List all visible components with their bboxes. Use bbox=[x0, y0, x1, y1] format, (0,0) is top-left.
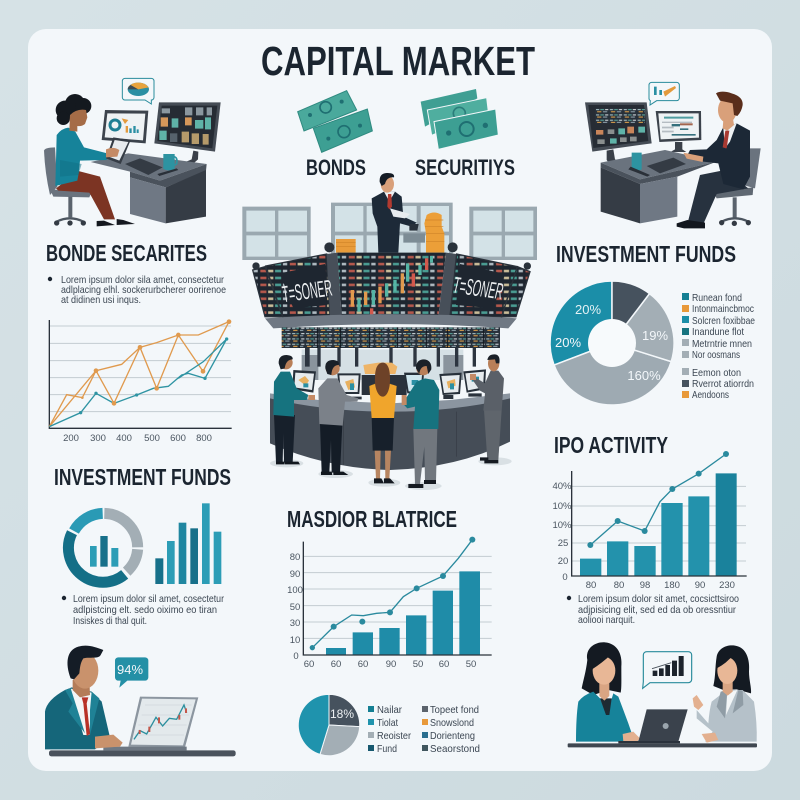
bar chart: masdior blatrice: 100 bbox=[287, 585, 303, 596]
bar chart: masdior blatrice bbox=[287, 537, 492, 670]
legend: investment funds: Aendoons bbox=[692, 389, 729, 401]
heading: investment funds right: INVESTMENT FUNDS bbox=[556, 241, 736, 267]
text block: bonde securities: at didinen usi inqus. bbox=[61, 294, 141, 306]
big monitor bbox=[154, 102, 221, 165]
legend: investment funds: Inandune flot bbox=[692, 326, 744, 338]
icon: speech bubble with pie bbox=[122, 78, 154, 104]
text block: investment funds: adlpistcing elt. sedo oiximo eo tiran bbox=[73, 604, 217, 616]
bar chart: ipo activity: 10% bbox=[552, 520, 572, 531]
desk bbox=[601, 150, 717, 223]
pie chart: bottom bbox=[298, 694, 360, 756]
pie label: 18% bbox=[330, 707, 354, 721]
illustration: two women with laptop bbox=[568, 642, 757, 747]
legend: investment funds: Eemon oton bbox=[692, 367, 741, 379]
illustration: man at desk bbox=[585, 82, 761, 228]
small monitor bbox=[102, 110, 148, 143]
bar chart: ipo activity: 180 bbox=[664, 580, 680, 591]
bar chart: masdior blatrice: 50 bbox=[413, 659, 423, 670]
trader five bbox=[470, 354, 504, 463]
bar chart: ipo activity: 10% bbox=[552, 501, 572, 512]
stock ticker and candles bbox=[351, 256, 433, 315]
trader two bbox=[318, 360, 358, 475]
legend: bottom pie: Tiolat bbox=[377, 717, 398, 729]
donut chart: investment funds bbox=[550, 281, 674, 405]
line chart: bonde securities bbox=[49, 319, 232, 444]
legend: bottom pie: Topeet fond bbox=[430, 704, 479, 716]
lower floor bbox=[265, 314, 517, 490]
icon: bonds banknotes bbox=[298, 91, 372, 152]
bar chart: ipo activity: 25 bbox=[558, 538, 568, 549]
bar chart: masdior blatrice: 80 bbox=[290, 552, 300, 563]
desk bbox=[91, 153, 207, 223]
bar chart: masdior blatrice: 60 bbox=[304, 659, 314, 670]
bar chart: ipo activity: 90 bbox=[695, 580, 705, 591]
illustration: woman at desk bbox=[44, 78, 221, 226]
text block: investment funds bbox=[62, 593, 224, 627]
legend: bottom pie: Seaorstond bbox=[430, 743, 480, 755]
heading: investment funds left: INVESTMENT FUNDS bbox=[54, 464, 231, 490]
windows bbox=[242, 203, 537, 260]
laptop bbox=[103, 697, 198, 750]
heading: bonde securities: BONDE SECARITES bbox=[46, 240, 207, 266]
text block: bonde securities bbox=[48, 274, 226, 306]
chair bbox=[713, 148, 761, 226]
legend: bottom pie: Dorienteng bbox=[430, 730, 475, 742]
small monitor bbox=[656, 111, 701, 152]
bar chart: masdior blatrice: 90 bbox=[386, 659, 396, 670]
legend: bottom pie: Nailar bbox=[377, 704, 402, 716]
line chart: bonde securities: 600 bbox=[170, 433, 186, 444]
legend: investment funds: Solcren foxibbae bbox=[692, 315, 755, 327]
upper screens bbox=[252, 242, 531, 317]
legend: investment funds: Metrntrie mnen bbox=[692, 338, 752, 350]
legend: bottom pie: Snowslond bbox=[430, 717, 474, 729]
shadows bbox=[270, 457, 512, 490]
bar chart: ipo activity: 40% bbox=[552, 481, 572, 492]
illustration: man with laptop bbox=[45, 646, 236, 756]
trader one bbox=[273, 355, 315, 464]
label: percent: 94% bbox=[117, 662, 143, 677]
laptop bbox=[618, 709, 688, 743]
text block: ipo activity: aoliooi narquit. bbox=[578, 614, 635, 626]
bar chart: ipo activity: 0 bbox=[562, 572, 568, 583]
man figure bbox=[45, 646, 123, 749]
illustration: trading floor: T=SONER bbox=[452, 272, 505, 304]
heading: masdior blatrice: MASDIOR BLATRICE bbox=[287, 506, 457, 532]
title: CAPITAL MARKET bbox=[261, 38, 535, 84]
line chart: bonde securities: 200 bbox=[63, 433, 79, 444]
bar chart: ipo activity: 80 bbox=[614, 580, 624, 591]
bar chart: masdior blatrice: 60 bbox=[331, 659, 341, 670]
desk bar bbox=[568, 743, 757, 747]
icon: speech bubble bbox=[649, 82, 679, 105]
icon: chart bubble bbox=[643, 652, 692, 688]
legend: bottom pie bbox=[368, 704, 480, 755]
icon: percent bubble bbox=[115, 657, 148, 688]
text block: bonde securities: adlplacing elhl. sockerurbcherer oorirenoe bbox=[61, 284, 226, 296]
illustration: trading floor: T=SONER bbox=[281, 274, 334, 307]
bar chart: ipo activity: 98 bbox=[640, 580, 650, 591]
bar chart: ipo activity bbox=[552, 451, 747, 591]
line chart: bonde securities: 800 bbox=[196, 433, 212, 444]
bar chart: masdior blatrice: 90 bbox=[290, 569, 300, 580]
big monitor bbox=[585, 102, 652, 165]
donut chart: investment funds: 20% bbox=[555, 335, 581, 350]
text block: ipo activity: adjpisicing elit, sed ed da ob oressntiur bbox=[578, 604, 736, 616]
donut chart: investment funds: 160% bbox=[627, 368, 661, 383]
trader on top bbox=[336, 173, 444, 253]
legend: investment funds bbox=[682, 292, 755, 401]
text block: ipo activity: Lorem ipsum dolor sit amet, cocsicttsiroo bbox=[578, 593, 739, 605]
text block: investment funds: Insiskes di thal quit. bbox=[73, 615, 147, 627]
bar chart: masdior blatrice: 60 bbox=[358, 659, 368, 670]
woman right bbox=[693, 645, 757, 743]
chair bbox=[44, 147, 92, 226]
line chart: bonde securities: 300 bbox=[90, 433, 106, 444]
trader four bbox=[402, 359, 439, 488]
terminal monitors bbox=[292, 369, 486, 399]
bar chart: masdior blatrice: 10 bbox=[290, 635, 300, 646]
line chart: bonde securities: 400 bbox=[116, 433, 132, 444]
text block: bonde securities: Lorem ipsum dolor sila amet, consectetur bbox=[61, 274, 224, 286]
legend: investment funds: Runean fond bbox=[692, 292, 742, 304]
label: bonds: BONDS bbox=[306, 155, 366, 180]
bar chart: masdior blatrice: 0 bbox=[293, 651, 299, 662]
legend: bottom pie: Reoister bbox=[377, 730, 411, 742]
donut and bars: investment funds bbox=[68, 503, 221, 584]
bar chart: masdior blatrice: 50 bbox=[466, 659, 476, 670]
bar chart: ipo activity: 230 bbox=[719, 580, 735, 591]
woman left bbox=[576, 642, 640, 742]
bar chart: ipo activity: 20 bbox=[558, 556, 568, 567]
donut chart: investment funds: 19% bbox=[642, 328, 668, 343]
text block: investment funds: Lorem ipsum dolor sil amet, cosectetur bbox=[73, 593, 224, 605]
heading: ipo activity: IPO ACTIVITY bbox=[554, 432, 668, 458]
label: securities: SECURITIYS bbox=[415, 155, 515, 180]
text block: ipo activity bbox=[567, 593, 739, 626]
line chart: bonde securities: 500 bbox=[144, 433, 160, 444]
legend: investment funds: Rverrot atiorrdn bbox=[692, 378, 754, 390]
man figure bbox=[677, 92, 750, 228]
legend: bottom pie: Fund bbox=[377, 743, 397, 755]
woman figure bbox=[55, 94, 135, 226]
bar chart: ipo activity: 80 bbox=[586, 580, 596, 591]
legend: investment funds: Nor oosmans bbox=[692, 349, 740, 361]
legend: investment funds: Intonmaincbmoc bbox=[692, 303, 754, 315]
bar chart: masdior blatrice: 30 bbox=[290, 618, 300, 629]
bar chart: masdior blatrice: 50 bbox=[290, 602, 300, 613]
icon: securities banknotes bbox=[421, 89, 498, 149]
illustration: trading floor bbox=[242, 173, 537, 490]
bar chart: masdior blatrice: 60 bbox=[439, 659, 449, 670]
trader three: woman bbox=[369, 363, 397, 483]
donut chart: investment funds: 20% bbox=[575, 302, 601, 317]
desk bar bbox=[49, 750, 236, 756]
